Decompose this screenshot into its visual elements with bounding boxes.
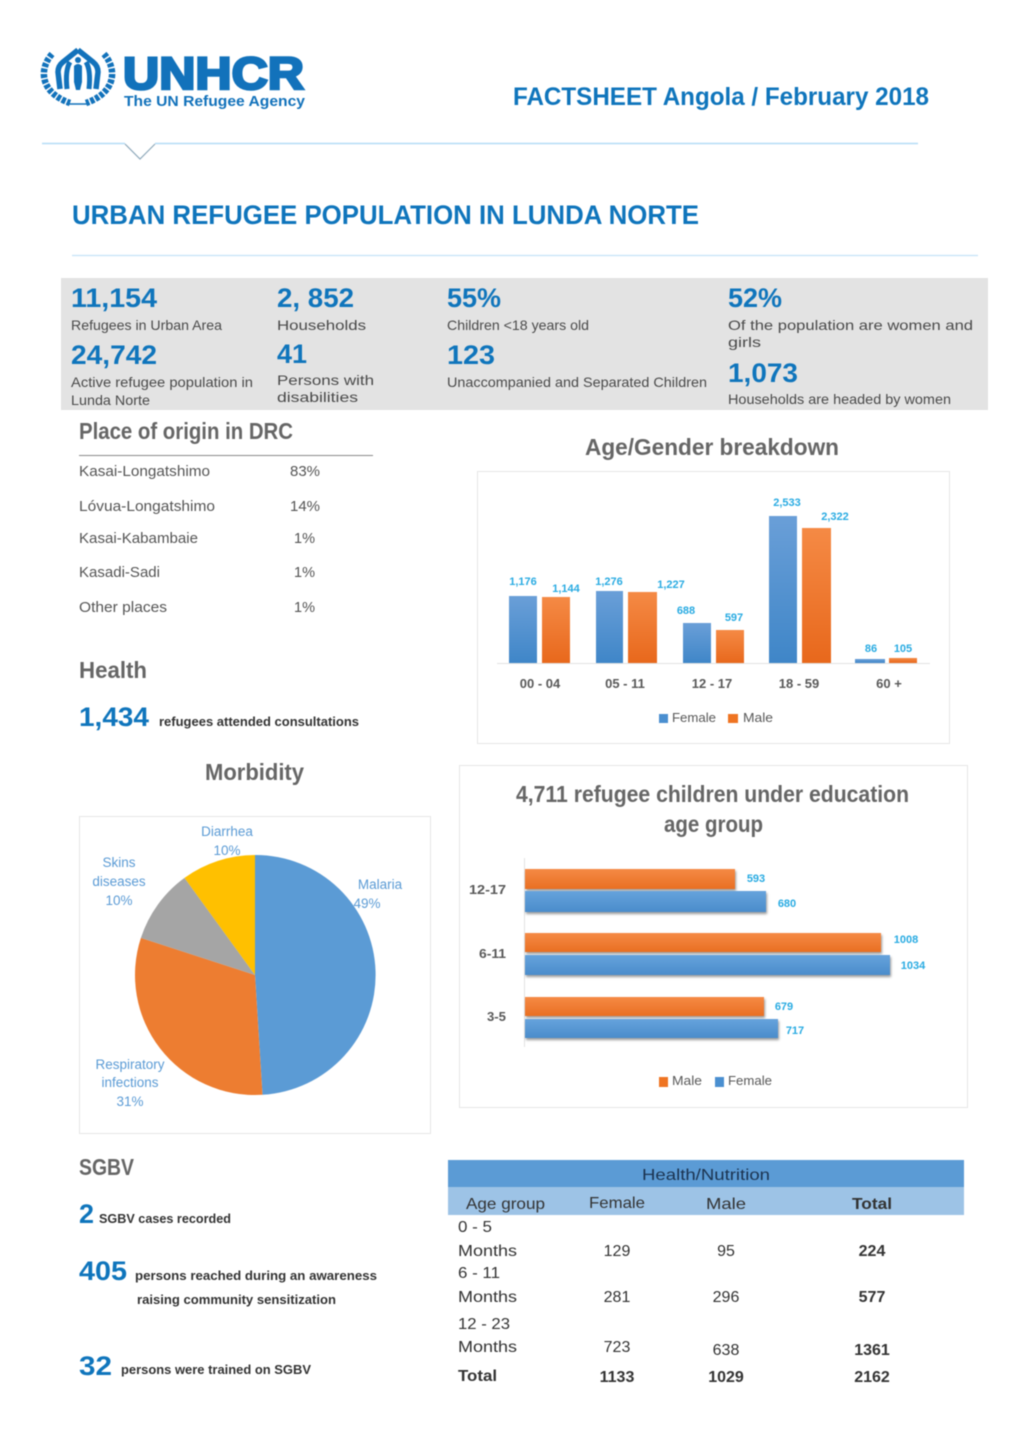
row: 12-23 months: 723	[604, 1339, 630, 1356]
stat: households: Households	[277, 317, 366, 333]
row: 0-5 months: 129	[604, 1243, 630, 1260]
panel: place of origin	[79, 418, 373, 616]
row: 12-23 months: 1361	[854, 1342, 890, 1359]
y axis labels: 3-5	[487, 1009, 506, 1024]
bars: 12-17: 680	[778, 898, 796, 910]
row: 6-11 months: 577	[859, 1289, 885, 1306]
panel: health	[79, 657, 359, 732]
row: 12-23 months: Months	[458, 1339, 517, 1356]
stat: children: 55%	[447, 283, 501, 313]
chart title	[516, 781, 909, 837]
label: skin diseases	[92, 855, 146, 908]
stat: persons with disabilities: Persons with	[277, 372, 374, 388]
bars: 12-17: 688	[677, 605, 695, 617]
stat: persons reached: raising community sensitization	[137, 1292, 336, 1307]
stat: active population: 24,742	[71, 340, 157, 370]
chart: morbidity pie	[80, 816, 430, 1134]
origin row: other places: 1%	[294, 599, 315, 616]
stat: urban refugees: Refugees in Urban Area	[71, 317, 222, 333]
stat: consultations: 1,434	[79, 702, 149, 732]
bars: 00-04: 1,176	[509, 576, 537, 588]
bars: 12-17	[525, 869, 796, 914]
origin row: Kasai-Kabambaie: Kasai-Kabambaie	[79, 530, 198, 547]
x axis labels	[520, 676, 902, 691]
origin row: Kasai-Kabambaie: 1%	[294, 530, 315, 547]
label: respiratory infections: Respiratory	[95, 1057, 165, 1072]
stat: cases recorded: SGBV cases recorded	[99, 1211, 231, 1226]
legend: Male	[672, 1074, 702, 1088]
stat: unaccompanied children	[447, 340, 707, 390]
stat: persons trained: 32	[79, 1351, 112, 1381]
table column headers: Age group	[466, 1196, 545, 1213]
slice: malaria	[255, 855, 376, 1095]
legend: Male	[743, 711, 773, 725]
table column headers: Total	[852, 1196, 892, 1213]
bars: 18-59	[769, 497, 849, 663]
stat: persons with disabilities: 41	[277, 339, 307, 369]
row: 0-5 months: 95	[717, 1243, 735, 1260]
bars: 12-17	[677, 605, 744, 663]
stat: persons trained: persons were trained on SGBV	[121, 1362, 311, 1377]
row: 12-23 months: 12 - 23	[458, 1316, 510, 1333]
heading: morbidity: Morbidity	[205, 759, 304, 785]
bars: 6-11: 1034	[901, 960, 926, 972]
bars: 00-04	[509, 576, 581, 663]
row: total: 1029	[708, 1369, 744, 1386]
x axis labels: 00 - 04	[520, 676, 561, 691]
origin row: other places: Other places	[79, 599, 167, 616]
stat: cases recorded	[79, 1199, 231, 1229]
origin row: Kasai-Longatshimo	[79, 463, 320, 480]
stat: women and girls: girls	[728, 334, 761, 350]
stat: consultations: refugees attended consultations	[159, 714, 359, 729]
label: malaria: Malaria	[358, 877, 403, 892]
row: 0-5 months: 0 - 5	[458, 1219, 492, 1236]
tagline: The UN Refugee Agency	[124, 93, 306, 110]
header divider with chevron	[42, 144, 918, 159]
y axis labels: 6-11	[479, 946, 506, 961]
table title: Health/Nutrition	[642, 1167, 770, 1184]
wordmark: UNHCR	[123, 48, 304, 99]
origin row: Lóvua-Longatshimo: 14%	[290, 498, 320, 515]
origin row: Lóvua-Longatshimo	[79, 498, 320, 515]
stat: persons with disabilities	[277, 339, 374, 405]
table column headers	[466, 1195, 892, 1213]
bars: 05-11	[595, 576, 685, 663]
stat: cases recorded: 2	[79, 1199, 94, 1229]
legend: Female	[672, 711, 716, 725]
stat: female-headed households: Households are headed by women	[728, 391, 951, 407]
stat: children: Children <18 years old	[447, 317, 589, 333]
heading: age/gender breakdown: Age/Gender breakdown	[585, 434, 839, 460]
stat: unaccompanied children: 123	[447, 340, 495, 370]
stat: women and girls: 52%	[728, 283, 782, 313]
stat: households	[277, 283, 366, 333]
label: skin diseases: Skins	[102, 855, 136, 870]
stat: active population: Lunda Norte	[71, 392, 150, 408]
table column headers: Male	[706, 1196, 746, 1213]
row: 6-11 months	[458, 1265, 885, 1306]
stat: persons reached: persons reached during an awareness	[135, 1268, 377, 1283]
row: 0-5 months: Months	[458, 1243, 517, 1260]
row: 12-23 months: 638	[713, 1342, 739, 1359]
origin row: Kasai-Kabambaie	[79, 530, 315, 547]
heading: SGBV: SGBV	[79, 1154, 135, 1180]
origin row: Kasai-Longatshimo: Kasai-Longatshimo	[79, 463, 210, 480]
row: 12-23 months	[458, 1316, 890, 1359]
panel: SGBV	[79, 1154, 377, 1381]
bars: 00-04: 1,144	[552, 583, 581, 595]
row: total: Total	[458, 1368, 497, 1385]
label: skin diseases: 10%	[105, 893, 133, 908]
label: respiratory infections: infections	[101, 1075, 159, 1090]
origin row: Lóvua-Longatshimo: Lóvua-Longatshimo	[79, 498, 215, 515]
stat: women and girls: Of the population are women and	[728, 317, 973, 333]
origin row: Kasai-Longatshimo: 83%	[290, 463, 320, 480]
label: respiratory infections: 31%	[116, 1094, 144, 1109]
bars: 6-11: 1008	[894, 934, 918, 946]
chart: age/gender bar chart	[478, 472, 950, 744]
bars: 18-59: 2,322	[821, 511, 849, 523]
label: skin diseases: diseases	[92, 874, 146, 889]
stat: female-headed households: 1,073	[728, 358, 798, 388]
row: total: 1133	[600, 1369, 634, 1386]
bars: 05-11: 1,276	[595, 576, 623, 588]
bars: 3-5: 679	[775, 1001, 793, 1013]
bars: 18-59: 2,533	[773, 497, 801, 509]
stat: urban refugees	[71, 283, 222, 333]
bars: 60+: 105	[894, 643, 912, 655]
label: malaria: 49%	[353, 896, 381, 911]
row: 0-5 months	[458, 1219, 885, 1260]
y axis labels: 12-17	[469, 882, 506, 897]
bars: 3-5: 717	[786, 1025, 804, 1037]
bars: 12-17: 593	[747, 873, 765, 885]
stat: children	[447, 283, 589, 333]
stat: persons reached	[79, 1256, 377, 1307]
label: diarrhea: Diarrhea	[201, 824, 253, 839]
chart title: age group	[664, 811, 763, 837]
slice: skin diseases	[141, 878, 255, 975]
stat: active population: Active refugee population in	[71, 374, 253, 390]
bars: 60+: 86	[865, 643, 877, 655]
stat: consultations	[79, 702, 359, 732]
stat: female-headed households	[728, 358, 951, 407]
panel: key figures	[61, 278, 988, 410]
stat: unaccompanied children: Unaccompanied and Separated Children	[447, 374, 707, 390]
label: diarrhea: 10%	[213, 843, 241, 858]
page title: URBAN REFUGEE POPULATION IN LUNDA NORTE	[72, 200, 699, 230]
row: 6-11 months: 6 - 11	[458, 1265, 500, 1282]
label: diarrhea	[201, 824, 253, 858]
row: 6-11 months: 296	[713, 1289, 739, 1306]
origin row: Kasadi-Sadi: Kasadi-Sadi	[79, 564, 160, 581]
x axis labels: 18 - 59	[779, 676, 819, 691]
origin row: Kasadi-Sadi	[79, 564, 315, 581]
x axis labels: 12 - 17	[692, 676, 732, 691]
bars: 3-5	[525, 997, 804, 1040]
stat: active population	[71, 340, 253, 408]
x axis labels: 05 - 11	[605, 676, 645, 691]
heading: health: Health	[79, 657, 147, 683]
row: 6-11 months: 281	[604, 1289, 630, 1306]
bars: 6-11	[525, 933, 926, 977]
row: total: 2162	[854, 1369, 890, 1386]
y axis labels	[469, 882, 506, 1024]
stat: households: 2, 852	[277, 283, 354, 313]
heading: place of origin: Place of origin in DRC	[79, 418, 293, 444]
stat: urban refugees: 11,154	[71, 283, 157, 313]
table column headers: Female	[589, 1195, 645, 1212]
bars: 60+	[855, 643, 917, 663]
label: respiratory infections	[95, 1057, 165, 1109]
row: 0-5 months: 224	[859, 1243, 885, 1260]
stat: persons reached: 405	[79, 1256, 127, 1286]
legend: Female	[728, 1074, 772, 1088]
slice: diarrhea	[184, 855, 255, 975]
table: health and nutrition	[448, 1160, 964, 1386]
chart: education bar chart	[460, 766, 968, 1108]
chart title: 4,711 refugee children under education	[516, 781, 909, 807]
stat: women and girls	[728, 283, 973, 350]
x axis labels: 60 +	[876, 676, 902, 691]
legend	[659, 1074, 772, 1088]
row: 6-11 months: Months	[458, 1289, 517, 1306]
slice: respiratory infections	[135, 938, 262, 1095]
bars: 12-17: 597	[725, 612, 743, 624]
factsheet heading: FACTSHEET Angola / February 2018	[513, 83, 929, 111]
row: total	[458, 1368, 890, 1386]
stat: persons with disabilities: disabilities	[277, 389, 358, 405]
label: malaria	[353, 877, 403, 911]
legend	[659, 711, 773, 725]
icon: UNHCR emblem	[44, 50, 112, 104]
origin row: other places	[79, 599, 315, 616]
origin row: Kasadi-Sadi: 1%	[294, 564, 315, 581]
stat: persons trained	[79, 1351, 311, 1381]
bars: 05-11: 1,227	[657, 579, 685, 591]
UNHCR logo	[44, 48, 306, 110]
